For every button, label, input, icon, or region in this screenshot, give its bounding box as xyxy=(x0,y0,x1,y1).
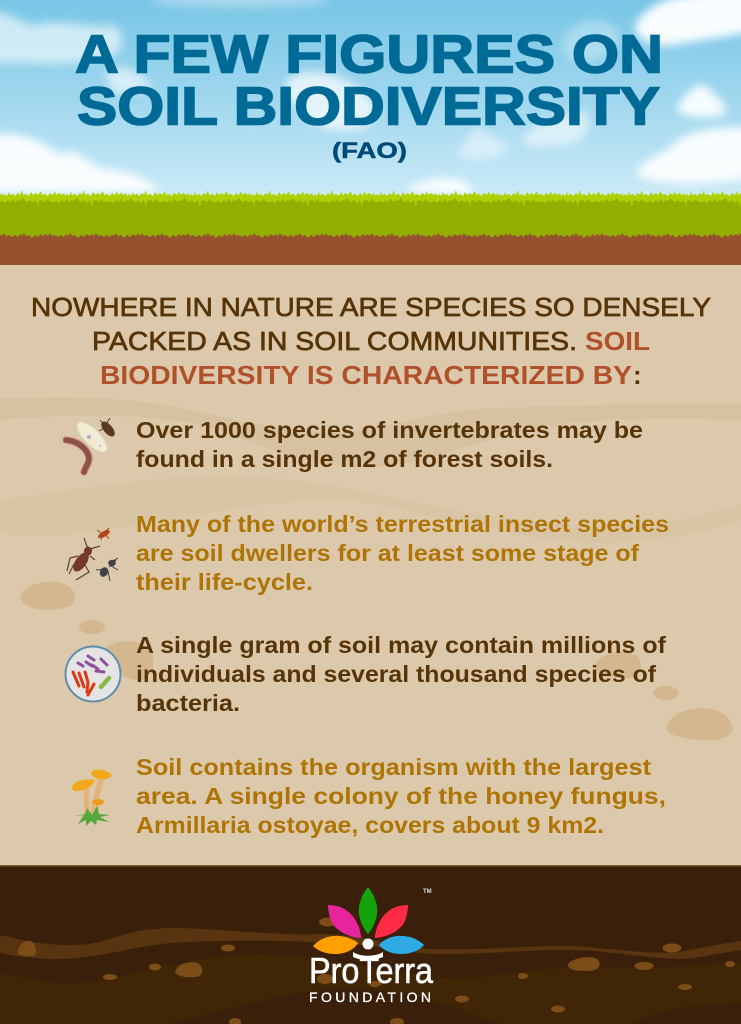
icon: petri dish with bacteria xyxy=(66,646,120,702)
item 3: bacteria xyxy=(66,632,666,716)
item 4: fungus xyxy=(72,754,666,838)
text: fungus fact: Soil contains the organism with the largest xyxy=(136,754,651,780)
icon: smile arc xyxy=(353,952,383,960)
icon: beetle and ants xyxy=(67,528,118,581)
text: invertebrates fact xyxy=(136,417,643,472)
text: fungus fact: Armillaria ostoyae, covers about 9 km2. xyxy=(136,812,604,838)
text: insects fact: their life-cycle. xyxy=(136,569,313,595)
panel: grass and topsoil xyxy=(0,190,741,265)
panel: sky with clouds xyxy=(0,0,741,200)
icon: worm, paramecium and beetle xyxy=(66,417,117,472)
text: insects fact: Many of the world’s terrestrial insect species xyxy=(136,511,669,537)
title: A FEW FIGURES ON xyxy=(75,24,663,84)
icon: mushrooms with grass xyxy=(72,770,112,826)
text: invertebrates fact: Over 1000 species of invertebrates may be xyxy=(136,417,643,443)
text: bacteria fact: individuals and several thousand species of xyxy=(136,661,656,687)
wordmark subtitle: FOUNDATION xyxy=(309,989,431,1005)
logo: ProTerra Foundation xyxy=(309,887,434,1005)
text: bacteria fact xyxy=(136,632,666,716)
heading: intro statement: SOIL xyxy=(585,326,650,356)
trademark: TM xyxy=(423,889,432,895)
text: bacteria fact: A single gram of soil may contain millions of xyxy=(136,632,666,658)
text: bacteria fact: bacteria. xyxy=(136,690,240,716)
wordmark: ProTerra xyxy=(309,950,434,991)
text: invertebrates fact: found in a single m2 of forest soils. xyxy=(136,446,553,472)
text: fungus fact: area. A single colony of the honey fungus, xyxy=(136,783,666,809)
heading: intro statement xyxy=(31,292,711,390)
text: fungus fact xyxy=(136,754,666,838)
heading: intro statement: NOWHERE IN NATURE ARE SPECIES SO DENSELY xyxy=(31,292,711,322)
panel: footer subsoil xyxy=(0,865,741,1024)
title xyxy=(75,24,663,136)
heading: intro statement: : xyxy=(633,360,642,390)
background: soil waves and pebbles xyxy=(0,397,741,740)
heading: intro statement: BIODIVERSITY IS CHARACTERIZED BY xyxy=(100,360,632,390)
text: insects fact: are soil dwellers for at least some stage of xyxy=(136,540,639,566)
icon: coloured petals xyxy=(313,887,424,954)
text: insects fact xyxy=(136,511,669,595)
title: SOIL BIODIVERSITY xyxy=(77,76,660,136)
heading: intro statement: PACKED AS IN SOIL COMMUNITIES. xyxy=(92,326,577,356)
subtitle: source: (FAO) xyxy=(332,138,407,163)
item 1: invertebrates xyxy=(66,417,643,472)
item 2: insects xyxy=(67,511,669,595)
